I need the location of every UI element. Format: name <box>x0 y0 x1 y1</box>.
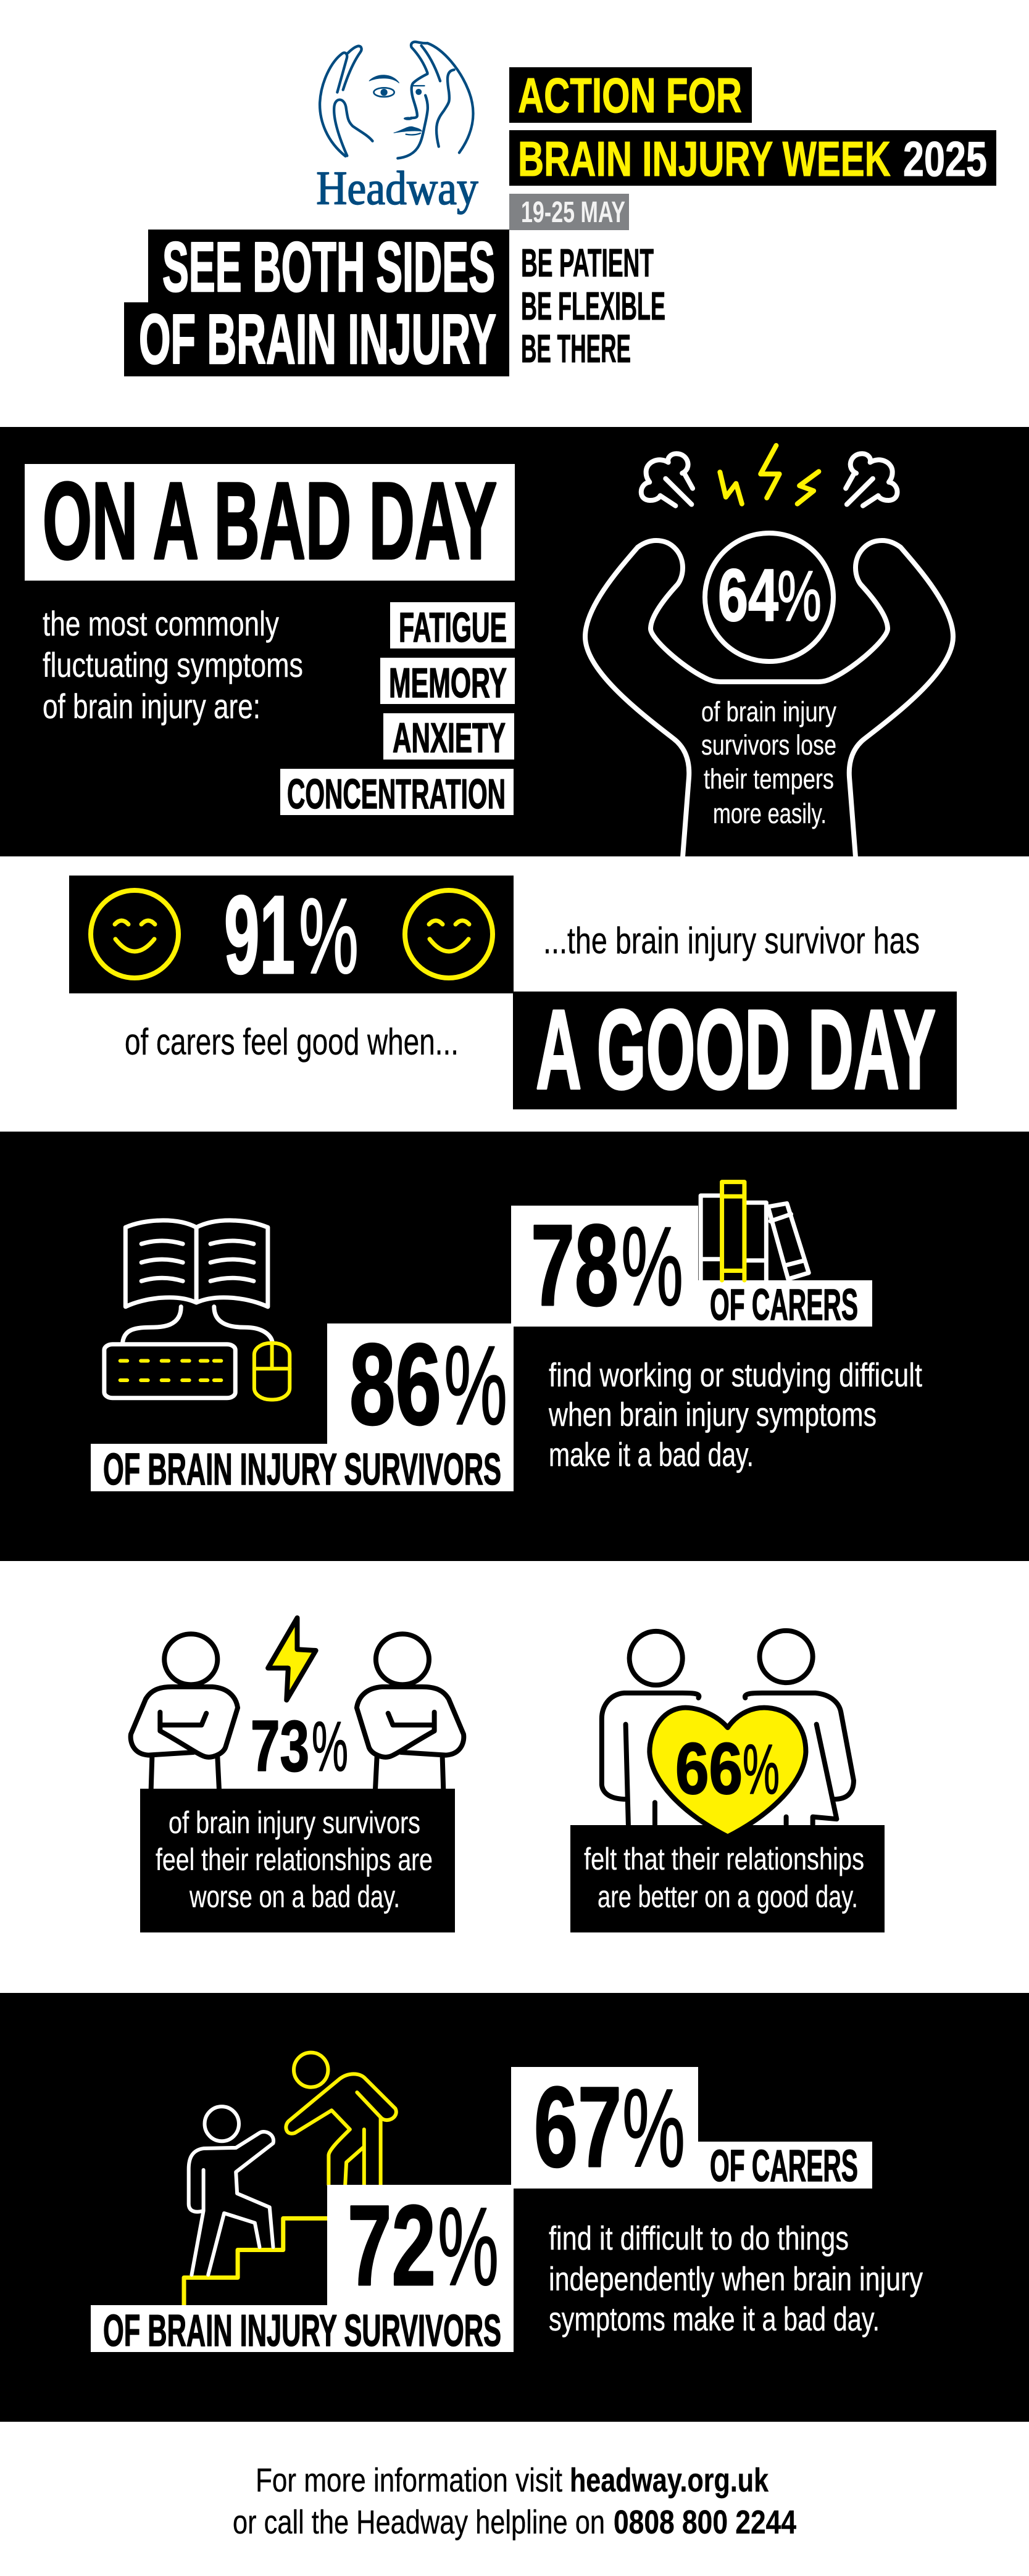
icon: angry person outline <box>585 533 953 857</box>
stat: 67% of carers: % <box>622 2066 685 2190</box>
footer: contact information: For more information visit <box>256 2462 562 2499</box>
text: be patient, be flexible, be there: BE THERE <box>521 326 631 371</box>
stat: 72% of brain injury survivors: OF BRAIN INJURY SURVIVORS <box>103 2306 501 2356</box>
text box: relationships better: felt that their relationships <box>584 1842 864 1876</box>
stat: 64%: % <box>777 556 822 636</box>
panel: 91% of carers <box>69 873 957 1112</box>
text: independence difficulty: symptoms make it a bad day. <box>549 2301 880 2338</box>
text: independence difficulty <box>549 2220 923 2338</box>
tag: concentration <box>280 769 514 818</box>
text: symptoms intro: the most commonly <box>43 604 279 643</box>
text: lose tempers: survivors lose <box>701 729 836 761</box>
heading: on a bad day <box>25 460 515 582</box>
text: working or studying <box>548 1357 922 1473</box>
text: lose tempers <box>701 696 836 829</box>
text: symptoms intro: of brain injury are: <box>43 687 260 726</box>
text: of carers feel good when: of carers feel good when... <box>125 1021 459 1062</box>
panel: relationships better on a good day <box>570 1631 885 1932</box>
text: symptoms intro: fluctuating symptoms <box>43 645 303 684</box>
icon: book, keyboard and mouse <box>104 1220 290 1399</box>
text: lose tempers: more easily. <box>713 798 827 829</box>
stat: 86% of brain injury survivors: OF BRAIN INJURY SURVIVORS <box>103 1445 501 1494</box>
stat: 73%: % <box>312 1708 348 1786</box>
stat: 86% of brain injury survivors: % <box>444 1322 507 1448</box>
text: the brain injury survivor has: ...the brain injury survivor has <box>543 920 920 961</box>
text: be patient, be flexible, be there: BE PATIENT <box>521 241 654 285</box>
footer: contact information: or call the Headway helpline on <box>233 2504 605 2541</box>
stat: 91%: % <box>299 876 359 996</box>
header: campaign title: ACTION FOR <box>518 68 742 123</box>
logo wordmark: Headway <box>316 162 478 215</box>
stat: 66%: 66 <box>675 1728 743 1810</box>
text box: relationships worse: worse on a bad day. <box>189 1879 400 1914</box>
text box: relationships better <box>570 1825 885 1932</box>
header: campaign title: 2025 <box>903 131 987 186</box>
text box: relationships worse <box>140 1789 455 1932</box>
panel: independence <box>0 1993 1029 2422</box>
tag: fatigue: FATIGUE <box>399 604 507 651</box>
stat: 72% of brain injury survivors: 72 <box>348 2182 436 2309</box>
heading: see both sides of brain injury: SEE BOTH SIDES <box>162 228 495 307</box>
stat: 72% of brain injury survivors: % <box>438 2185 499 2309</box>
text: lose tempers: of brain injury <box>701 696 836 727</box>
footer: contact information <box>233 2462 796 2541</box>
stat: 78% of carers: 78 <box>531 1201 619 1330</box>
stat: 91%: 91 <box>224 873 295 997</box>
text: working or studying: find working or studying difficult <box>549 1357 922 1394</box>
panel: on a bad day <box>0 427 1029 857</box>
heading: see both sides of brain injury: OF BRAIN INJURY <box>139 300 496 379</box>
text: working or studying: make it a bad day. <box>549 1436 754 1473</box>
stat: 67% of carers: OF CARERS <box>710 2142 858 2191</box>
text: lose tempers: their tempers <box>704 763 834 795</box>
icon: two people with arms crossed <box>131 1618 464 1789</box>
header: campaign title <box>509 67 996 186</box>
footer: contact information: 0808 800 2244 <box>614 2504 796 2541</box>
text: symptoms intro <box>43 604 303 726</box>
stat: 78% of carers: OF CARERS <box>710 1281 858 1330</box>
icon: two people climbing stairs <box>184 2053 396 2305</box>
tag: concentration: CONCENTRATION <box>287 771 506 818</box>
tag: memory <box>380 658 515 706</box>
date badge <box>509 194 629 230</box>
stat: 67% of carers: 67 <box>534 2064 622 2191</box>
tag: fatigue <box>390 602 515 651</box>
stat: 86% of brain injury survivors: 86 <box>349 1320 441 1449</box>
stat: 66%: % <box>743 1731 780 1809</box>
icon: two people with heart <box>602 1631 854 1837</box>
stat: 78% of carers <box>511 1201 872 1330</box>
icon: smiley right <box>405 890 493 978</box>
panel: working or studying <box>0 1132 1029 1561</box>
stat: 73%: 73 <box>251 1705 309 1786</box>
text box: relationships worse: feel their relationships are <box>156 1842 433 1877</box>
footer: contact information: headway.org.uk <box>570 2462 769 2499</box>
text: be patient, be flexible, be there <box>521 241 665 371</box>
stat: 86% of brain injury survivors <box>91 1320 514 1494</box>
header: campaign title: BRAIN INJURY WEEK <box>518 131 891 186</box>
stat: 78% of carers: % <box>621 1203 683 1329</box>
heading: see both sides of brain injury <box>124 228 509 379</box>
stat: 67% of carers <box>511 2064 872 2191</box>
tag: memory: MEMORY <box>389 660 507 706</box>
text: independence difficulty: find it difficult to do things <box>549 2220 849 2257</box>
tag: anxiety <box>383 713 514 761</box>
heading: on a bad day: ON A BAD DAY <box>43 460 497 582</box>
stat: 72% of brain injury survivors <box>91 2182 514 2356</box>
text box: relationships worse: of brain injury survivors <box>169 1805 420 1840</box>
icon: smiley left <box>91 890 178 978</box>
date badge: 19-25 MAY <box>521 196 625 229</box>
text box: relationships better: are better on a good day. <box>598 1879 858 1914</box>
stat: 64%: 64 <box>718 554 778 637</box>
panel: relationships worse on a bad day <box>131 1618 464 1932</box>
icon: books <box>701 1182 809 1280</box>
icon: face between two hands <box>320 42 473 159</box>
text: independence difficulty: independently when brain injury <box>549 2261 923 2298</box>
icon: steam clouds and lightning <box>641 445 898 506</box>
text: be patient, be flexible, be there: BE FLEXIBLE <box>521 284 665 328</box>
logo: Headway <box>316 42 478 215</box>
text: working or studying: when brain injury symptoms <box>548 1396 877 1433</box>
tag: anxiety: ANXIETY <box>393 714 506 761</box>
